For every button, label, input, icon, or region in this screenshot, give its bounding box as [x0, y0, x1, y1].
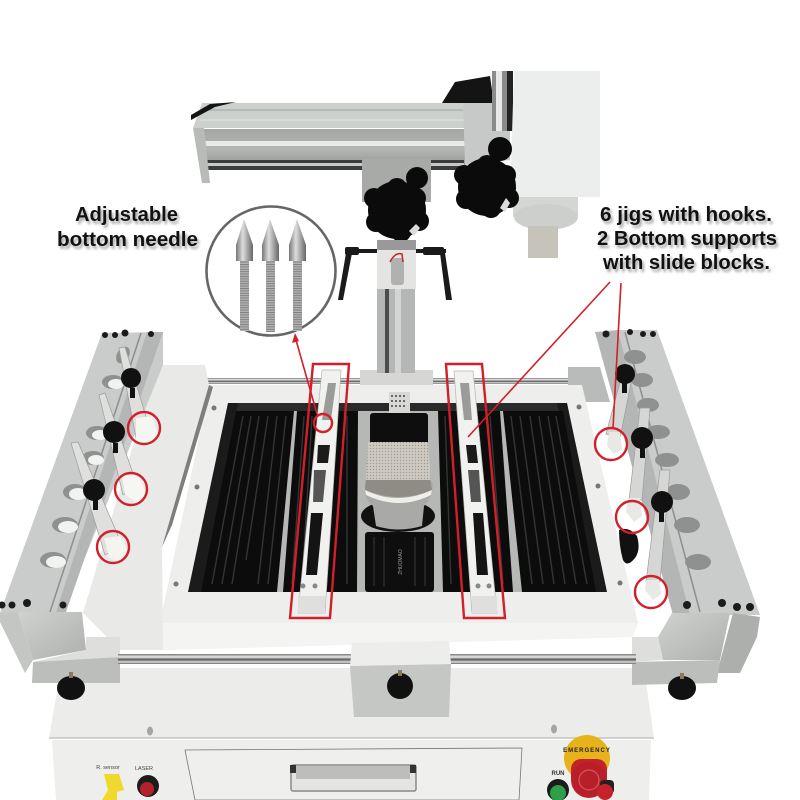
- centre heater plates: ZHUOMAO: [398, 549, 404, 575]
- clamp levers: [338, 247, 452, 300]
- drawer with handle: [185, 748, 522, 800]
- heater plate 4: [503, 411, 596, 592]
- callout: adjustable bottom needle label: Adjustable: [75, 204, 178, 226]
- right end block: [632, 613, 760, 685]
- front guide rod: [118, 654, 636, 664]
- callout: adjustable bottom needle label: bottom needle: [57, 229, 198, 251]
- heater plate 3: [438, 411, 513, 592]
- upper head housing and nozzle: [510, 71, 600, 258]
- emergency stop and run buttons: RUN: [552, 771, 564, 777]
- front knobs: [57, 670, 696, 700]
- needle 3: [289, 219, 306, 331]
- centre rod clamp: [350, 641, 451, 717]
- left arm knobs: [83, 368, 141, 510]
- needle 1: [236, 219, 253, 331]
- centre heater plates: [365, 413, 434, 592]
- right arm hook jigs: [606, 375, 670, 600]
- top arm with beam: [191, 76, 494, 183]
- right side arm: [595, 329, 760, 685]
- left end block: [0, 612, 120, 683]
- red highlight frame: left support: [290, 364, 349, 618]
- heater plate 1: [201, 411, 294, 592]
- control knobs: [364, 137, 519, 242]
- sensor port label and connector: [96, 765, 124, 800]
- emergency stop and run buttons: EMERGENCY: [563, 748, 611, 754]
- mounting holes: [624, 350, 711, 570]
- large knob right: [454, 155, 519, 218]
- sensor port label and connector: R. sensor: [96, 765, 120, 771]
- main lower plate: [160, 385, 638, 650]
- callout: jigs and supports label: with slide blocks.: [602, 252, 770, 274]
- callout: adjustable bottom needle label: [57, 204, 198, 251]
- vertical column with sensor block: [377, 240, 416, 373]
- machine body base: [49, 668, 654, 800]
- plate screws: [174, 404, 622, 586]
- arrow: needle circle to jig: [292, 333, 317, 414]
- heater plate 2: [283, 411, 358, 592]
- carriage bracket and column rods: [362, 71, 513, 202]
- corner screws: [602, 329, 754, 611]
- large knob centre: [364, 178, 429, 242]
- black handle below right jig: [619, 529, 639, 564]
- rear guide rod and rear bracket: [205, 367, 610, 402]
- emergency stop and run buttons: [547, 735, 614, 800]
- laser button: [135, 766, 159, 797]
- needle 2: [262, 219, 279, 332]
- left arm hook jigs: [71, 347, 158, 562]
- top centre sensor grid: [389, 392, 410, 413]
- right bottom support jig: [454, 371, 497, 613]
- left bottom support jig: [298, 370, 341, 613]
- screws on base: [147, 724, 557, 736]
- callout: needle magnifier circle: [206, 206, 336, 336]
- callout: jigs and supports label: [597, 204, 777, 274]
- bottom hot air nozzle cup: [361, 442, 435, 532]
- callout: jigs and supports label: 6 jigs with hooks.: [600, 204, 772, 226]
- laser button: LASER: [135, 766, 153, 772]
- corner screws: [0, 330, 154, 608]
- red highlight frame: right support: [446, 364, 505, 618]
- right arm knobs: [615, 364, 673, 522]
- leader lines to jigs and supports: [468, 282, 621, 437]
- mounting holes: [40, 344, 133, 568]
- red highlight circles on hooks: [97, 412, 667, 608]
- callout: jigs and supports label: 2 Bottom supports: [597, 228, 777, 250]
- heater bay: [188, 403, 607, 592]
- left side arm: [0, 330, 213, 683]
